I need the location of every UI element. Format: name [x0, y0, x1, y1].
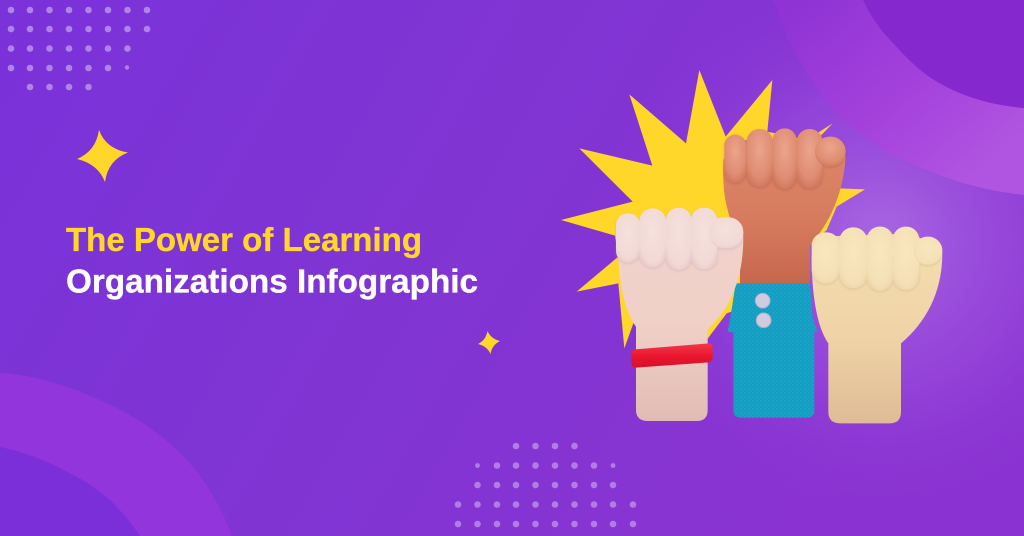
- icon: large sparkle: [77, 130, 128, 182]
- title line 1: The Power of Learning: [66, 222, 422, 259]
- decorative arc: bottom left: [0, 373, 232, 536]
- fist: terracotta hand with blue sleeve: [723, 128, 846, 418]
- starburst: [561, 70, 865, 348]
- cuff: [728, 283, 817, 335]
- cuff buttons: [755, 293, 771, 328]
- title: [66, 222, 478, 300]
- fist: cream hand: [812, 227, 942, 423]
- dot grid: top left: [8, 7, 150, 90]
- fingers: [724, 128, 846, 189]
- decorative arc: top right: [773, 0, 1024, 195]
- red wristband: [631, 343, 713, 368]
- palm and wrist: [812, 233, 942, 423]
- illustration: raised fists with starburst: [561, 70, 942, 423]
- palm and wrist: [723, 140, 846, 290]
- sleeve: [733, 328, 814, 418]
- palm and wrist: [617, 217, 743, 421]
- fingers: [616, 208, 743, 270]
- dot grid: bottom centre: [455, 443, 636, 527]
- fist: pink hand with red wristband: [616, 208, 743, 421]
- title line 2: Organizations Infographic: [66, 264, 478, 300]
- icon: small sparkle: [478, 331, 500, 354]
- fingers: [812, 227, 942, 291]
